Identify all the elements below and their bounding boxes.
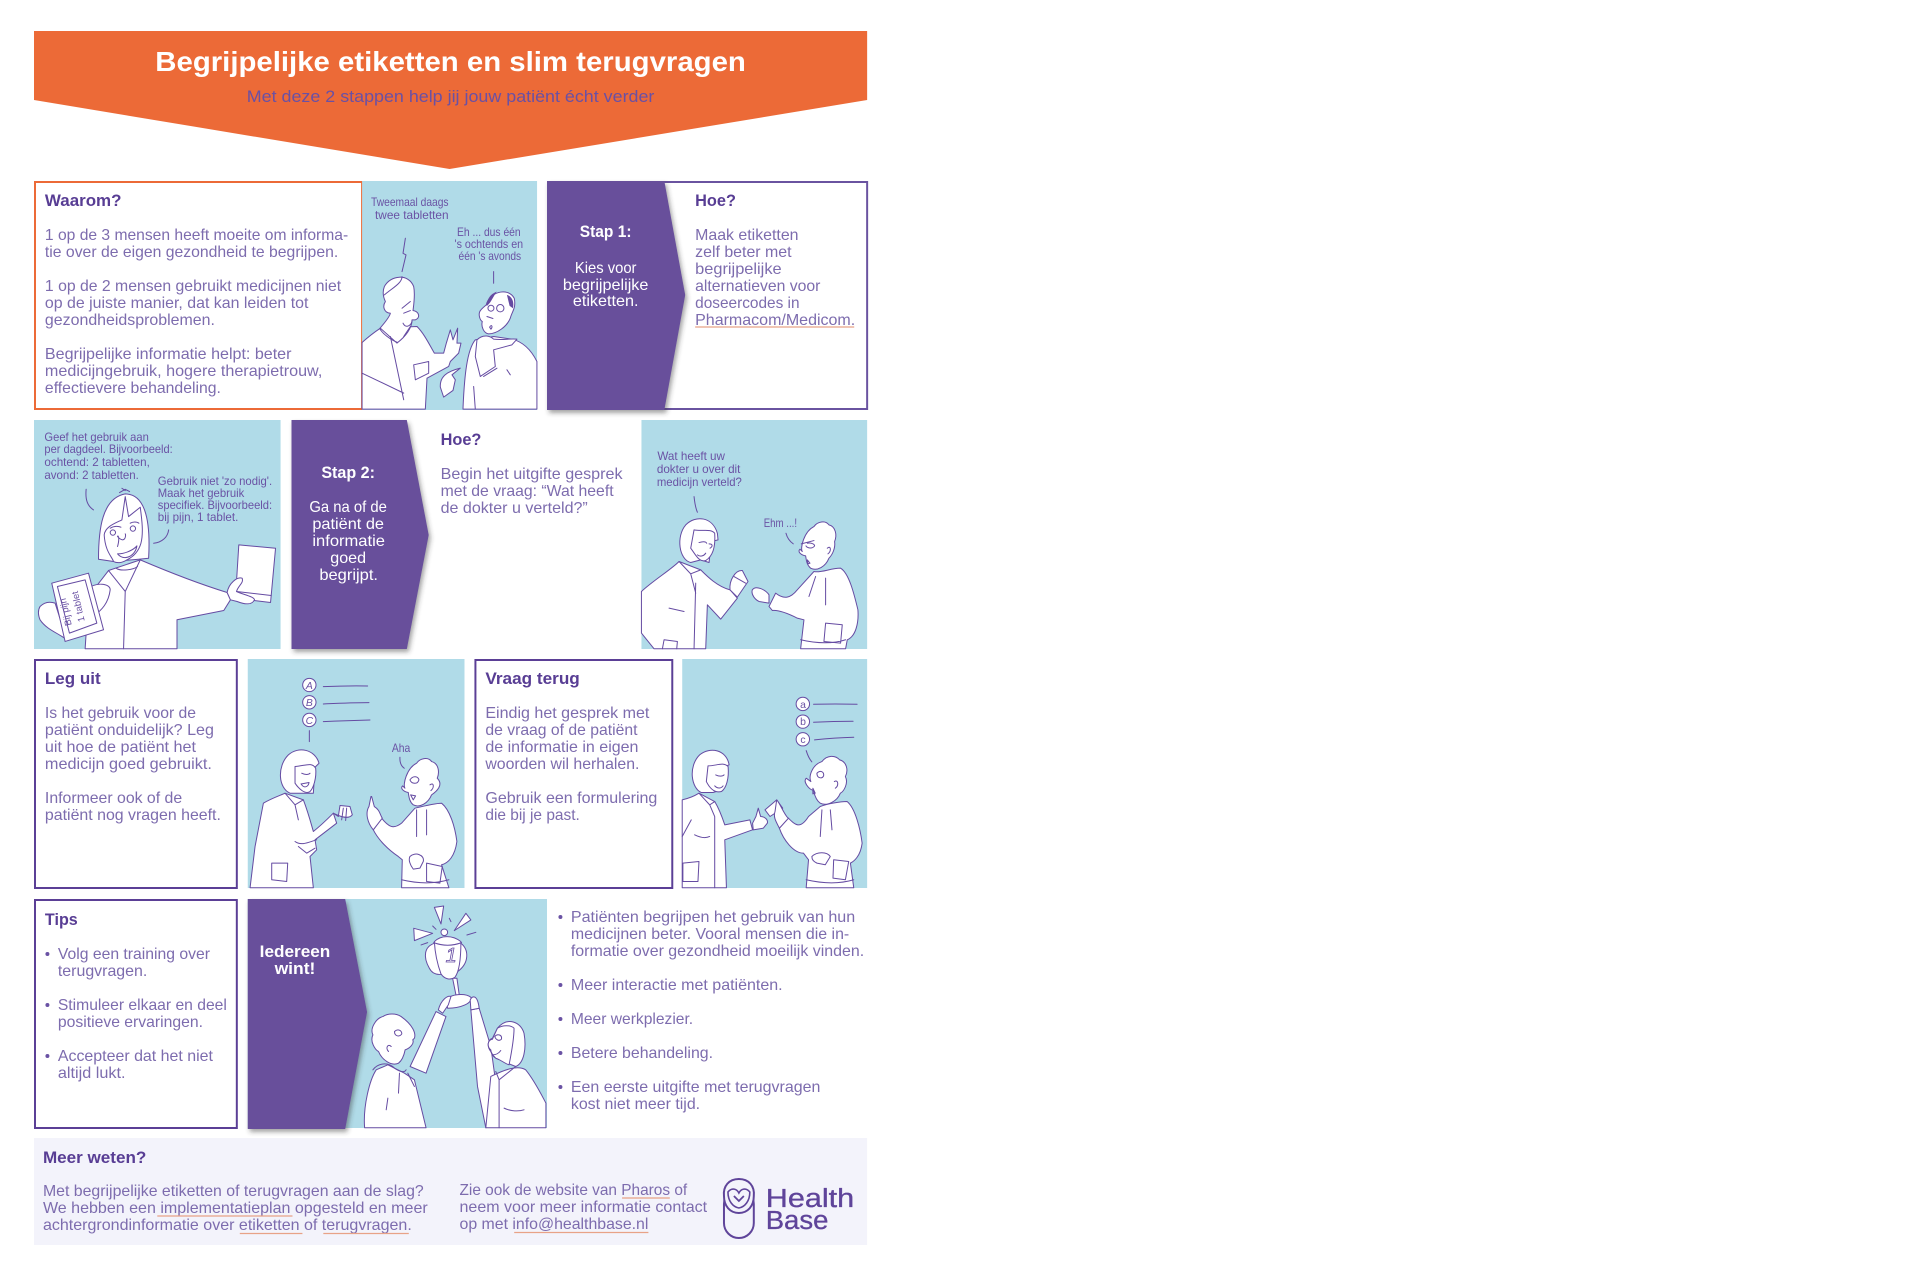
text: footer left: achtergrondinformatie over etiketten of terugvragen. bbox=[43, 1217, 412, 1234]
text: stap 1: Kies voor bbox=[575, 260, 636, 277]
trophy number and arrow: iedereen wint: 1 bbox=[446, 945, 457, 967]
heading: leg uit: Leg uit bbox=[45, 670, 101, 688]
text: vraag terug body: Gebruik een formulering bbox=[485, 790, 657, 807]
text: stap 2: begrijpt. bbox=[319, 567, 378, 584]
heading: hoe: Hoe? bbox=[441, 431, 481, 449]
figures: pharmacists bbox=[362, 238, 537, 409]
text: footer right: op met info@healthbase.nl bbox=[460, 1216, 648, 1233]
text: stap 1: begrijpelijke bbox=[563, 277, 648, 294]
list: benefits: medicijnen beter. Vooral mensen die in- bbox=[571, 926, 849, 943]
figures: pharmacist and patient bbox=[641, 497, 858, 649]
text: waarom body: 1 op de 3 mensen heeft moeite om informa- bbox=[45, 227, 348, 244]
text: vraag terug body: de vraag of de patiënt bbox=[485, 722, 638, 739]
text: hoe body: met de vraag: “Wat heeft bbox=[441, 483, 614, 500]
list: benefits bbox=[558, 909, 864, 1113]
panel: meer weten footer bbox=[34, 1138, 867, 1245]
text: footer left bbox=[43, 1183, 428, 1234]
text: hoe body: doseercodes in bbox=[695, 295, 800, 312]
speech text bbox=[657, 451, 797, 530]
speech text bbox=[371, 197, 523, 263]
box label text: Bij pijn bbox=[58, 597, 75, 627]
heading: vraag terug: Vraag terug bbox=[485, 670, 580, 688]
trophy number and arrow: iedereen wint bbox=[248, 899, 457, 1129]
box label text bbox=[58, 590, 88, 627]
text: waarom body bbox=[45, 227, 348, 397]
text: vraag terug body: woorden wil herhalen. bbox=[484, 756, 639, 773]
text: hoe body bbox=[441, 466, 623, 517]
list: tips: terugvragen. bbox=[58, 963, 147, 980]
illustration: asking the patient bbox=[641, 420, 867, 649]
text: stap 1: Stap 1: bbox=[580, 223, 632, 241]
list: benefits: Betere behandeling. bbox=[571, 1045, 713, 1062]
text: waarom body: medicijngebruik, hogere therapietrouw, bbox=[45, 363, 322, 380]
illustration: two pharmacists talking bbox=[362, 181, 537, 410]
subtitle: Met deze 2 stappen help jij jouw patiënt écht verder bbox=[247, 88, 655, 106]
text: stap 2 bbox=[309, 464, 387, 584]
text: stap 2: patiënt de bbox=[312, 516, 384, 533]
heading: tips: Tips bbox=[45, 911, 78, 929]
text: hoe body: begrijpelijke bbox=[695, 261, 782, 278]
text: vraag terug body bbox=[484, 705, 657, 824]
list: tips: Volg een training over bbox=[58, 946, 210, 963]
text: leg uit body: medicijn goed gebruikt. bbox=[45, 756, 212, 773]
logo: health base: Health bbox=[766, 1185, 854, 1213]
illustration: patient repeats bbox=[682, 659, 867, 888]
list: tips: altijd lukt. bbox=[58, 1065, 125, 1082]
panel: tips bbox=[35, 900, 237, 1128]
figures: pharmacist and patient bbox=[682, 697, 862, 888]
figure: pharmacist bbox=[39, 488, 276, 649]
list: benefits: Meer interactie met patiënten. bbox=[571, 977, 783, 994]
text: waarom body: gezondheidsproblemen. bbox=[45, 312, 215, 329]
list markers bbox=[800, 700, 806, 746]
speech text: Geef het gebruik aan bbox=[44, 432, 149, 444]
text: stap 2: informatie bbox=[312, 533, 385, 550]
speech text: Tweemaal daags bbox=[371, 197, 449, 209]
infographic content bbox=[34, 31, 867, 1245]
list: benefits: Patiënten begrijpen het gebruik van hun bbox=[571, 909, 855, 926]
text: hoe body: Begin het uitgifte gesprek bbox=[441, 466, 623, 483]
speech text: bij pijn, 1 tablet. bbox=[158, 512, 238, 524]
text: footer left: Met begrijpelijke etiketten of terugvragen aan de slag? bbox=[43, 1183, 424, 1200]
trophy number and arrow: iedereen wint: Iedereen bbox=[260, 942, 330, 961]
arrow: stap 1 bbox=[547, 181, 685, 410]
text: waarom body: 1 op de 2 mensen gebruikt medicijnen niet bbox=[45, 278, 342, 295]
speech text: medicijn verteld? bbox=[657, 477, 742, 489]
arrow: stap 2 bbox=[291, 420, 429, 649]
list markers: c bbox=[800, 735, 806, 746]
logo: health base bbox=[724, 1179, 854, 1238]
header banner bbox=[34, 31, 867, 169]
text: stap 2: Ga na of de bbox=[309, 499, 387, 516]
speech text: Ehm ...! bbox=[764, 518, 797, 530]
list markers and aha text: B bbox=[306, 698, 313, 709]
text: leg uit body: patiënt onduidelijk? Leg bbox=[45, 722, 214, 739]
list: benefits: formatie over gezondheid moeilijk vinden. bbox=[571, 943, 864, 960]
panel: vraag terug bbox=[475, 660, 672, 888]
text: hoe body: Pharmacom/Medicom. bbox=[695, 312, 855, 329]
speech text bbox=[44, 432, 272, 524]
text: hoe body: zelf beter met bbox=[695, 244, 792, 261]
heading: meer weten: Meer weten? bbox=[43, 1149, 146, 1167]
heading: waarom: Waarom? bbox=[45, 192, 121, 210]
illustration: pharmacist with label bbox=[34, 420, 281, 649]
text: vraag terug body: Eindig het gesprek met bbox=[485, 705, 650, 722]
list: benefits: kost niet meer tijd. bbox=[571, 1096, 700, 1113]
text: leg uit body: Informeer ook of de bbox=[45, 790, 182, 807]
speech text: Wat heeft uw bbox=[657, 451, 726, 463]
text: waarom body: op de juiste manier, dat kan leiden tot bbox=[45, 295, 309, 312]
text: vraag terug body: de informatie in eigen bbox=[485, 739, 638, 756]
text: leg uit body: patiënt nog vragen heeft. bbox=[45, 807, 221, 824]
list markers: a bbox=[800, 700, 806, 711]
text: footer left: We hebben een implementatieplan opgesteld en meer bbox=[43, 1200, 428, 1217]
list: tips: Stimuleer elkaar en deel bbox=[58, 997, 227, 1014]
panel: leg uit bbox=[35, 660, 237, 888]
text: waarom body: tie over de eigen gezondheid te begrijpen. bbox=[45, 244, 338, 261]
list markers and aha text: A bbox=[305, 681, 313, 692]
speech text: ochtend: 2 tabletten, bbox=[44, 457, 150, 469]
list markers and aha text bbox=[305, 681, 411, 755]
speech text: dokter u over dit bbox=[657, 464, 741, 476]
title: Begrijpelijke etiketten en slim terugvragen bbox=[155, 46, 746, 77]
figures: pharmacist and patient bbox=[250, 678, 457, 888]
list: benefits: Meer werkplezier. bbox=[571, 1011, 693, 1028]
speech text: twee tabletten bbox=[375, 210, 449, 222]
text: waarom body: effectievere behandeling. bbox=[45, 380, 221, 397]
logo: health base: Base bbox=[766, 1207, 828, 1235]
text: leg uit body: Is het gebruik voor de bbox=[45, 705, 196, 722]
text: vraag terug body: die bij je past. bbox=[485, 807, 580, 824]
text block: stap 2 hoe bbox=[441, 431, 623, 517]
list markers and aha text: C bbox=[306, 716, 314, 727]
text: footer right: Zie ook de website van Pharos of bbox=[460, 1182, 688, 1199]
text: hoe body: Maak etiketten bbox=[695, 227, 799, 244]
speech text: avond: 2 tabletten. bbox=[44, 470, 139, 482]
panel: waarom bbox=[35, 182, 362, 409]
panel: stap 1 hoe bbox=[547, 181, 867, 410]
text: stap 1: etiketten. bbox=[573, 293, 638, 310]
speech text: één 's avonds bbox=[459, 251, 521, 263]
text: footer right: neem voor meer informatie contact bbox=[460, 1199, 708, 1216]
speech text: Maak het gebruik bbox=[158, 488, 245, 500]
illustration: everybody wins bbox=[248, 899, 547, 1129]
list: tips: Accepteer dat het niet bbox=[58, 1048, 214, 1065]
speech text: specifiek. Bijvoorbeeld: bbox=[158, 500, 272, 512]
figures: trophy raised by two people bbox=[364, 906, 546, 1128]
illustration: explaining steps bbox=[248, 659, 464, 888]
text: stap 1 bbox=[563, 223, 648, 310]
text: waarom body: Begrijpelijke informatie helpt: beter bbox=[45, 346, 291, 363]
text: stap 2: Stap 2: bbox=[321, 464, 375, 482]
speech text: Eh ... dus één bbox=[457, 227, 521, 239]
text: leg uit body bbox=[45, 705, 221, 824]
list: benefits: Een eerste uitgifte met terugvragen bbox=[571, 1079, 820, 1096]
box label text: 1 tablet bbox=[70, 590, 88, 623]
text: footer right bbox=[460, 1182, 708, 1233]
speech text: Gebruik niet 'zo nodig'. bbox=[158, 476, 272, 488]
speech text: 's ochtends en bbox=[455, 239, 523, 251]
text: hoe body bbox=[695, 227, 855, 329]
list markers and aha text: Aha bbox=[392, 743, 411, 755]
list: tips bbox=[45, 946, 227, 1082]
list: tips: positieve ervaringen. bbox=[58, 1014, 203, 1031]
heading: hoe: Hoe? bbox=[695, 192, 736, 210]
text: stap 2: goed bbox=[330, 550, 366, 567]
trophy number and arrow: iedereen wint: wint! bbox=[274, 959, 315, 978]
text: leg uit body: uit hoe de patiënt het bbox=[45, 739, 197, 756]
speech text: per dagdeel. Bijvoorbeeld: bbox=[44, 444, 173, 456]
list markers: b bbox=[800, 717, 806, 728]
text: hoe body: de dokter u verteld?” bbox=[441, 500, 588, 517]
text: hoe body: alternatieven voor bbox=[695, 278, 820, 295]
banner arrow shape bbox=[34, 31, 867, 169]
